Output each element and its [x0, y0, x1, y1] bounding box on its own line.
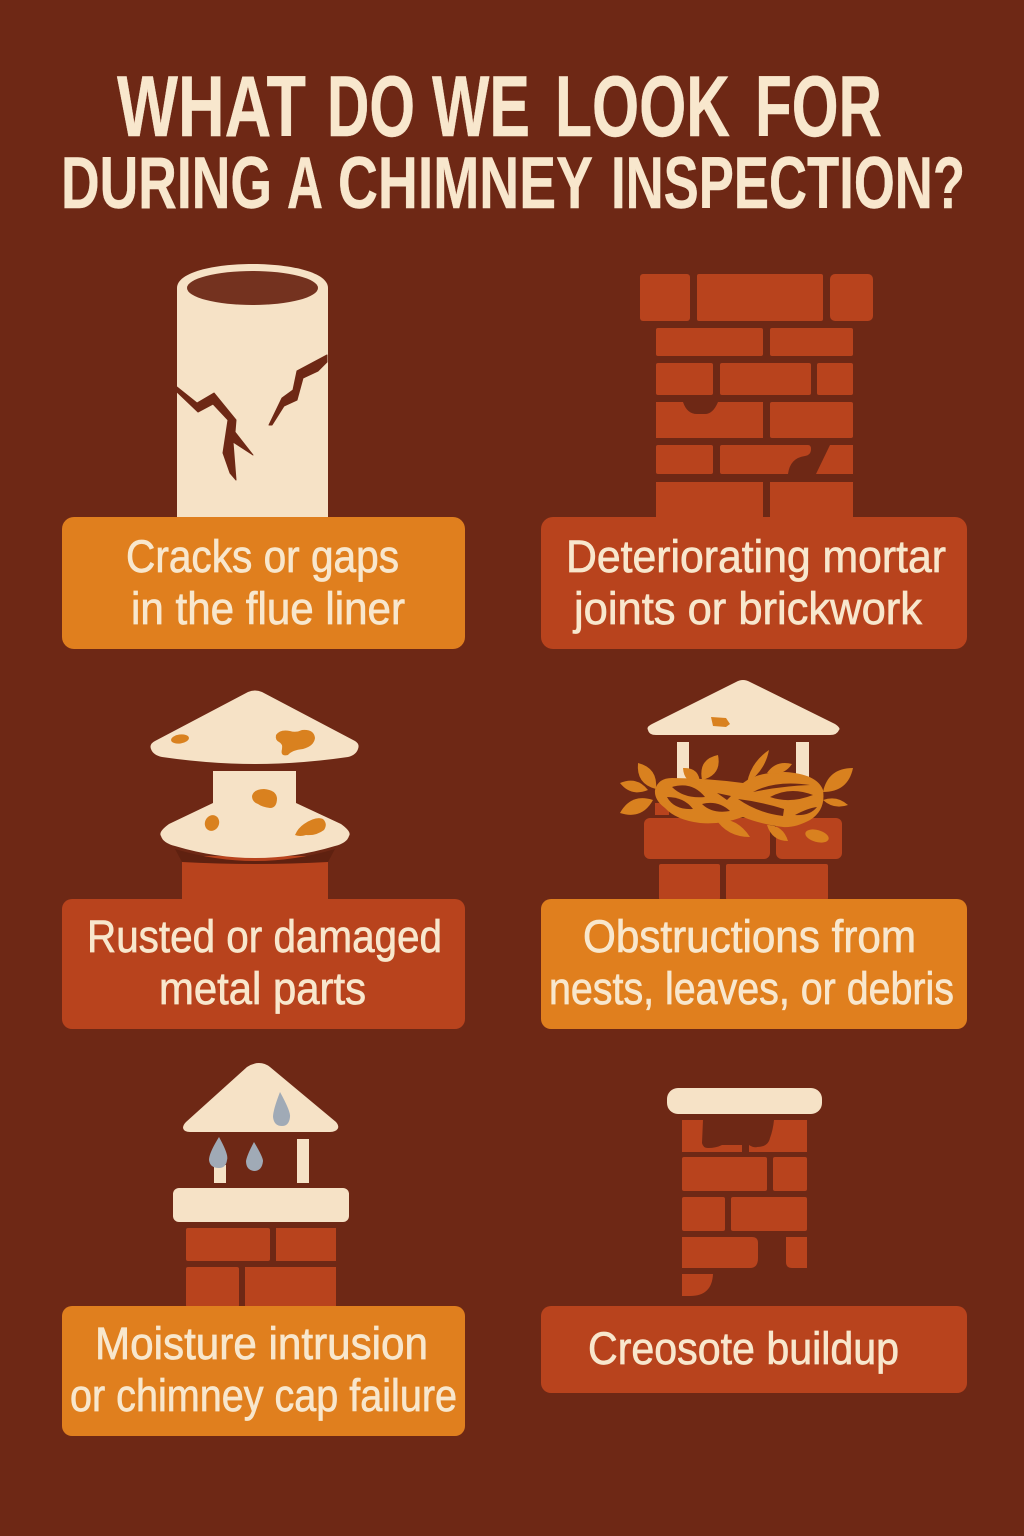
title: LOOK — [555, 59, 730, 155]
title: WHAT — [117, 59, 306, 155]
label: deteriorating mortar — [541, 517, 967, 649]
label: rusted metal parts — [62, 899, 465, 1029]
icon: rusted chimney cap — [150, 690, 359, 900]
label: cracks or gaps: Cracks or gaps — [126, 531, 399, 582]
label: cracks or gaps: in the flue liner — [131, 583, 405, 634]
label: deteriorating mortar: Deteriorating mortar — [566, 531, 946, 582]
panel: deteriorating mortar — [541, 274, 967, 649]
title: WE — [432, 59, 530, 155]
label: moisture intrusion: Moisture intrusion — [95, 1318, 428, 1369]
label: cracks or gaps — [62, 517, 465, 649]
panel: obstructions — [541, 680, 967, 1029]
title: FOR — [755, 59, 882, 155]
label: rusted metal parts: Rusted or damaged — [87, 911, 442, 962]
icon: cracked flue liner — [177, 264, 328, 517]
title: DURING — [61, 143, 272, 224]
label: deteriorating mortar: joints or brickwork — [572, 583, 922, 634]
title: DO — [327, 59, 415, 155]
icon: nest on chimney — [620, 680, 853, 900]
label: obstructions — [541, 899, 967, 1029]
title: CHIMNEY — [338, 143, 593, 224]
label: moisture intrusion — [62, 1306, 465, 1436]
label: creosote buildup: Creosote buildup — [588, 1323, 899, 1374]
panel: cracks in flue liner — [62, 264, 465, 649]
title — [61, 59, 965, 224]
panel: creosote buildup — [541, 1088, 967, 1393]
icon: damaged brick chimney — [640, 274, 873, 518]
title: A — [287, 143, 323, 224]
label: obstructions: Obstructions from — [583, 911, 916, 962]
label: obstructions: nests, leaves, or debris — [549, 963, 954, 1014]
label: moisture intrusion: or chimney cap failure — [70, 1370, 457, 1421]
icon: leaking chimney cap — [173, 1063, 349, 1307]
label: rusted metal parts: metal parts — [159, 963, 366, 1014]
icon: chimney with creosote damage — [667, 1088, 822, 1296]
panel: moisture intrusion — [62, 1063, 465, 1436]
panel: rusted metal parts — [62, 690, 465, 1029]
label: creosote buildup — [541, 1306, 967, 1393]
